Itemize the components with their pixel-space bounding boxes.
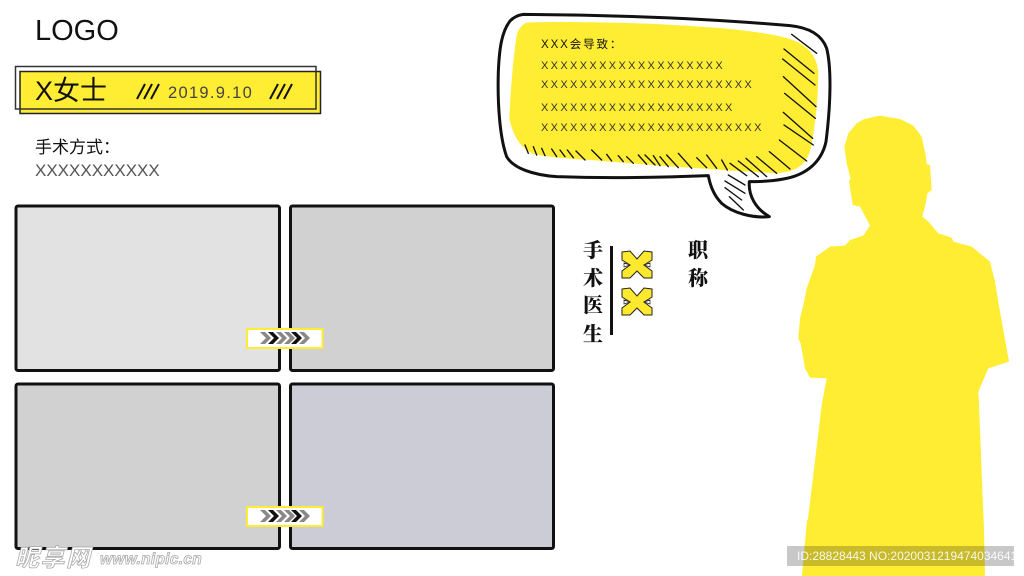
name banner <box>16 66 320 114</box>
surgery method heading: 手术方式： <box>35 138 120 157</box>
bubble text lines: XXXXXXXXXXXXXXXXXXXXXXX <box>541 122 764 134</box>
panel: photo 3 <box>16 384 280 548</box>
panel: photo 2 <box>290 206 554 370</box>
arrow badge bottom <box>247 507 322 526</box>
watermark id strip <box>787 546 1024 566</box>
hatching <box>525 34 817 210</box>
patient name: X女士 <box>35 76 107 106</box>
logo: LOGO <box>35 15 119 47</box>
speech bubble <box>498 14 830 217</box>
bubble outline <box>498 14 830 217</box>
watermark site: 昵享网 <box>15 545 93 572</box>
role label: surgeon: 生 <box>583 323 603 346</box>
slashes right <box>270 84 292 99</box>
role label: surgeon: 手 <box>583 239 603 262</box>
watermark site <box>15 545 202 572</box>
watermark id strip: ID:28828443 NO:20200312194740346414 <box>797 549 1024 563</box>
surgery method value: XXXXXXXXXXX <box>35 161 160 180</box>
watermark site: www.nipic.cn <box>100 551 202 568</box>
role label: surgeon <box>583 239 603 346</box>
role label: surgeon: 医 <box>583 294 603 317</box>
panel: photo 4 <box>290 384 554 548</box>
bubble yellow fill <box>509 22 818 173</box>
bubble text lines: XXXXXXXXXXXXXXXXXXX <box>541 60 725 72</box>
decorative name X top <box>622 251 652 278</box>
silhouette of doctor <box>798 116 1009 576</box>
job title label: 职 <box>688 239 710 262</box>
bubble text lines: XXXXXXXXXXXXXXXXXXXX <box>541 102 735 114</box>
bubble heading: XXX会导致： <box>541 37 623 51</box>
job title label <box>688 239 710 290</box>
date: 2019.9.10 <box>168 84 253 102</box>
vertical divider bar <box>610 246 613 335</box>
panel: photo 1 <box>16 206 280 370</box>
decorative name X bottom <box>622 288 652 315</box>
slashes left <box>137 84 159 99</box>
arrow badge top <box>247 329 322 348</box>
bubble text lines: XXXXXXXXXXXXXXXXXXXXXX <box>541 79 754 91</box>
job title label: 称 <box>688 267 710 290</box>
bubble text lines <box>541 60 764 134</box>
role label: surgeon: 术 <box>583 267 603 290</box>
